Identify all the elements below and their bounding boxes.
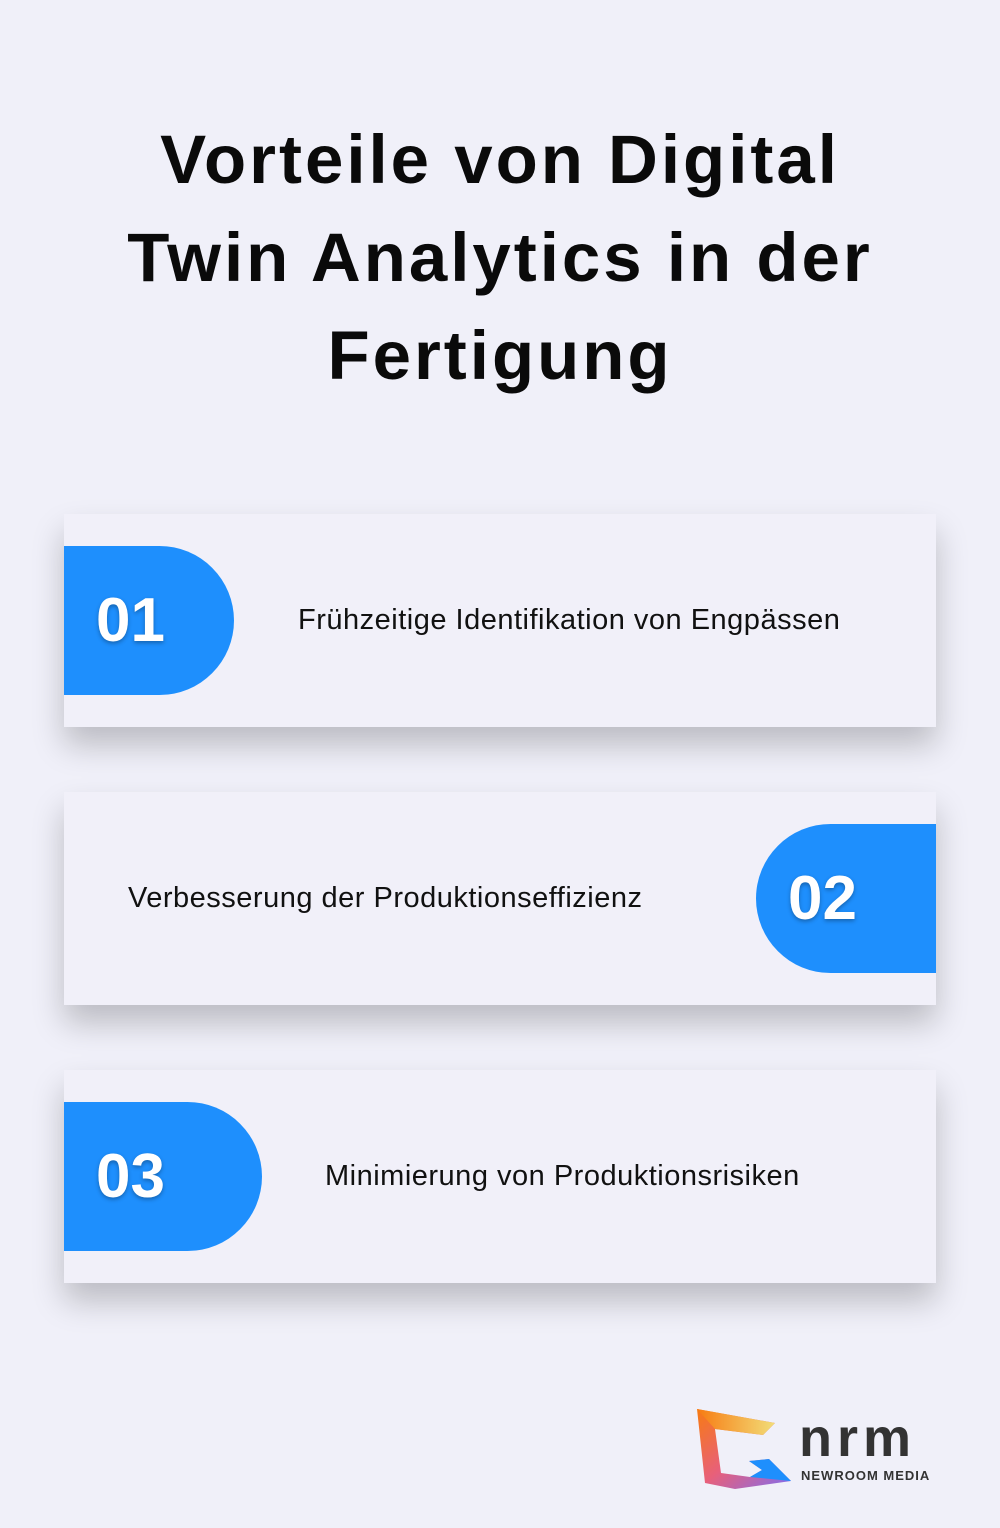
title: Fertigung xyxy=(327,317,673,394)
title: Twin Analytics in der xyxy=(127,219,873,296)
logo text: nrm xyxy=(799,1408,916,1468)
card 2 xyxy=(64,792,936,1005)
badge 01 xyxy=(64,546,234,695)
badge 03 xyxy=(64,1102,262,1251)
logo icon xyxy=(697,1409,791,1489)
text 3: Minimierung von Produktionsrisiken xyxy=(325,1160,800,1192)
badge 03: 03 xyxy=(96,1142,165,1211)
badge 02 xyxy=(756,824,936,973)
card 1 xyxy=(64,514,936,727)
card 3 xyxy=(64,1070,936,1283)
logo xyxy=(697,1408,930,1489)
text 1: Frühzeitige Identifikation von Engpässen xyxy=(298,604,840,636)
title xyxy=(127,121,873,394)
badge 02: 02 xyxy=(788,864,857,933)
badge 01: 01 xyxy=(96,586,165,655)
title: Vorteile von Digital xyxy=(160,121,840,198)
text 2: Verbesserung der Produktionseffizienz xyxy=(128,882,642,914)
logo: NEWROOM MEDIA xyxy=(801,1468,930,1483)
